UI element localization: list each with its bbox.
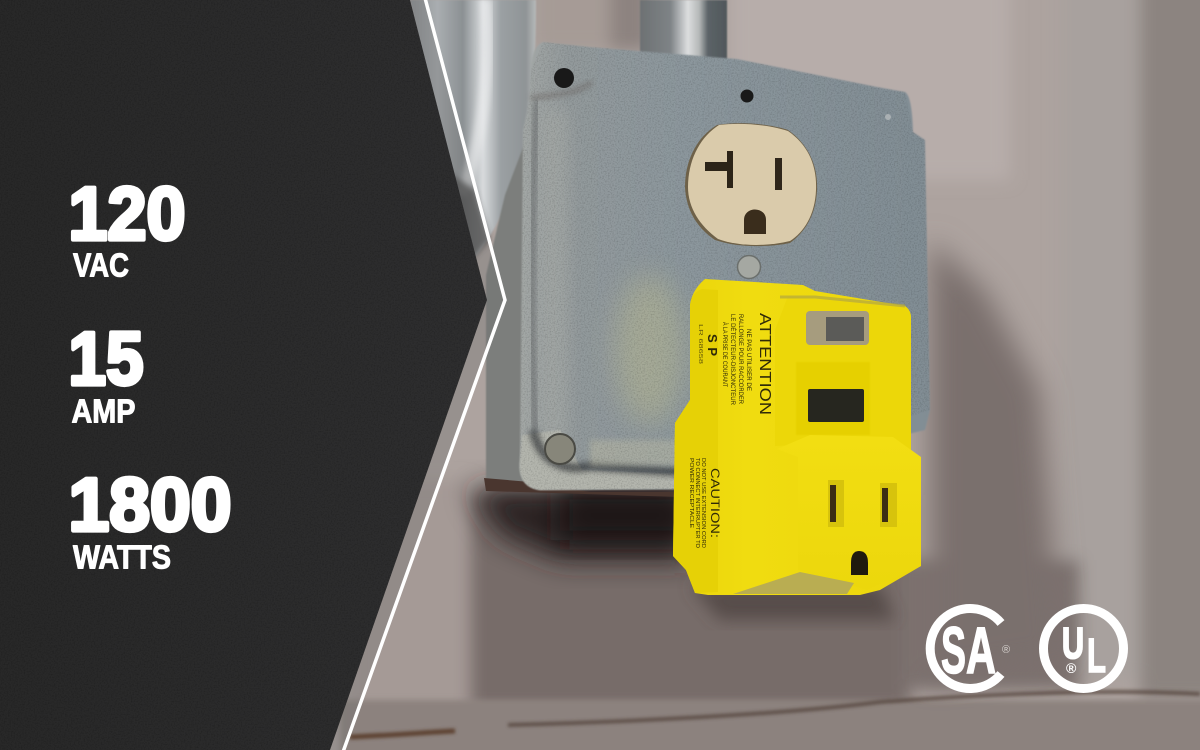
translucent strip between panel and outline [330,0,505,750]
outlet slots [828,480,897,575]
printed label: CAUTION: DO NOT USE EXTENSION CORD [700,458,706,548]
electrical conduit pipes [410,0,727,268]
adapter body [673,279,921,595]
panel: dark textured spec panel [0,0,500,750]
metal texture [520,42,930,490]
printed label: ATTENTION: ATTENTION [756,313,773,415]
unit: WATTS: WATTS [73,538,171,576]
mounting holes [554,68,574,88]
top flange shading [531,82,592,98]
icon: UL certification mark [1044,608,1124,688]
printed label: ATTENTION: NE PAS UTILISER DE [745,329,752,392]
spec: 15 AMP [68,316,144,430]
screws [545,434,575,464]
icon: CSA certification mark [930,608,1010,688]
block mortar lines [350,495,1200,737]
printed label: ATTENTION: RALLONGE POUR RACCORDER [737,314,744,404]
printed label: ATTENTION: LE DÉTECTEUR-DISJONCTEUR [729,314,738,405]
printed label: CAUTION: POWER RECEPTACLE [688,458,694,529]
raised button plateau [775,296,911,450]
icon: UL certification mark: U [1062,619,1084,668]
printed label: ATTENTION [697,313,773,415]
underside shadow [733,572,854,594]
printed label: CAUTION [688,458,720,548]
icon: CSA certification mark: A [966,613,996,687]
unit: AMP: AMP [72,392,136,430]
icon: UL certification mark: L [1087,630,1106,683]
white chevron outline [343,0,505,750]
printed label: ATTENTION: À LA PRISE DE COURANT [721,322,730,387]
shadow cast by the box and adapter [470,240,1062,680]
number: 1800: 1800 [68,462,232,546]
icon: UL certification mark: ® [1066,660,1077,676]
printed label: CAUTION: CAUTION: [708,468,720,538]
front outlet face [777,435,921,590]
large curved conduit [410,0,536,268]
printed label: ATTENTION: LR 68658 [697,324,703,364]
icon: CSA certification mark: S [941,613,966,687]
icon: CSA certification mark: ® [1002,644,1010,656]
reset button [806,311,869,345]
lower flange with raised face edge [520,430,680,490]
spec: 120 VAC [68,172,186,284]
beige duplex outlet [685,123,817,246]
rear box edge [486,145,524,490]
spec: 1800 WATTS [68,462,232,576]
box cover plate [520,42,930,490]
unit: VAC: VAC [73,246,129,284]
number: 15: 15 [68,316,144,400]
metal junction box [484,42,930,497]
printed label: ATTENTION: SP [705,334,720,356]
yellow GFCI adapter [673,279,921,595]
printed label: CAUTION: TO CONNECT INTERRUPTER TO [694,458,700,548]
lower course of blocks [340,700,1200,750]
test button [808,389,864,422]
small conduit at top of box [640,0,727,60]
number: 120: 120 [68,172,186,256]
